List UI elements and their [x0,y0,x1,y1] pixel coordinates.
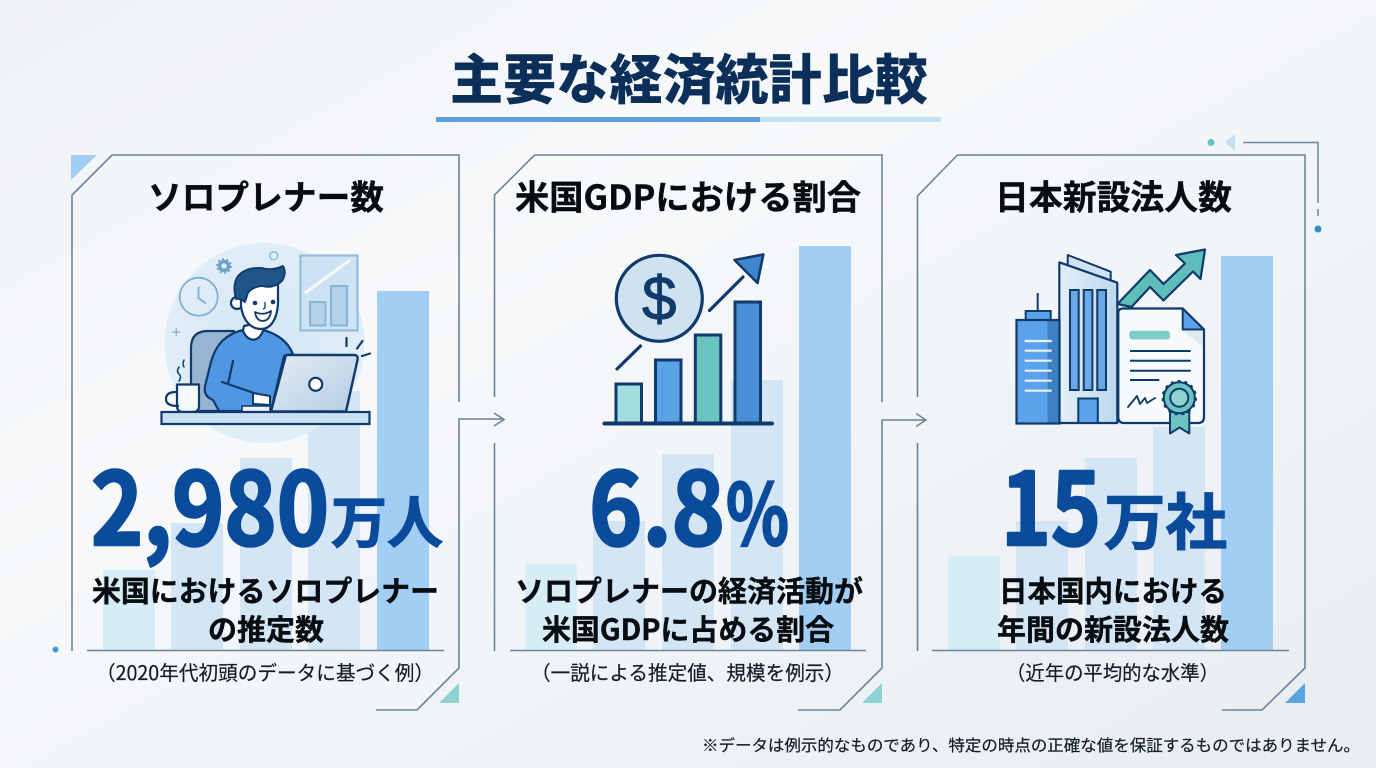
footnote: ※データは例示的なものであり、特定の時点の正確な値を保証するものではありません。 [702,732,1360,756]
description: 米国GDPに占める割合 [542,607,834,649]
value: 万社 [1104,473,1227,562]
panel frame [918,155,1305,710]
value: 15 [1001,429,1101,574]
heading: 日本新設法人数 [995,170,1232,220]
panel frame [494,155,926,710]
panel frame [72,155,504,710]
background bar chart [103,291,429,651]
title: 主要な経済統計比較 [450,36,928,115]
panel: solopreneur count [71,155,504,710]
description [515,568,863,649]
icon: dollar coin and rising bars: $ [642,265,677,334]
icon: dollar coin and rising bars [604,254,772,424]
description: 米国におけるソロプレナー [92,568,439,610]
note: （近年の平均的な水準） [1006,657,1219,686]
description: 年間の新設法人数 [997,607,1229,649]
decorative corner accent [52,134,1322,652]
heading: 米国GDPにおける割合 [515,170,861,220]
corner triangle teal [439,683,459,703]
icon: freelancer at laptop [162,243,370,443]
description: 日本国内における [999,568,1227,610]
panel: share of US GDP [494,155,926,710]
title underline [436,117,941,122]
value: 6.8 [589,429,725,574]
description: の推定数 [208,607,324,649]
description [92,568,439,649]
description: ソロプレナーの経済活動が [515,568,863,610]
corner triangle teal [862,683,882,703]
background bar chart [525,246,851,651]
panel: new corporations in Japan [918,155,1305,710]
background bar chart [948,256,1273,651]
value: % [726,449,789,570]
note: （一説による推定値、規模を例示） [531,657,844,686]
value: 万人 [331,479,443,560]
value [1001,429,1227,574]
icon: buildings, certificate and growth arrow [1016,250,1205,434]
corner triangle blue [71,155,97,180]
corner triangle blue [1285,683,1305,703]
description [997,568,1229,649]
heading: ソロプレナー数 [148,170,384,220]
value: 2,980 [91,429,329,574]
note: （2020年代初頭のデータに基づく例） [96,657,434,686]
